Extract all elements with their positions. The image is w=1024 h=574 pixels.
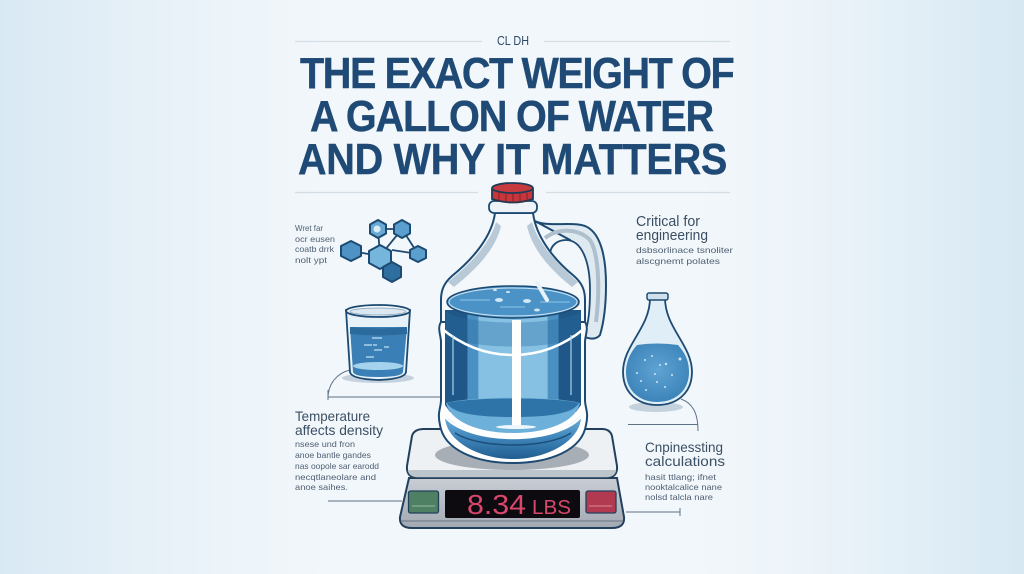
text block: temperature affects density: anoe bantle gandes <box>295 450 371 460</box>
text block: engineering calculations: hasit ttlang; ifnet <box>645 472 717 482</box>
subheading: temperature <box>295 408 383 438</box>
icon: flask <box>623 293 692 412</box>
text block: temperature affects density: nsese und fron <box>295 439 355 449</box>
title: AND WHY IT MATTERS <box>298 134 727 183</box>
subheading: temperature: affects density <box>295 422 383 438</box>
button: red <box>586 491 616 513</box>
subheading: calculations <box>645 439 725 469</box>
readout: 8.34 lbs <box>445 489 580 520</box>
text block: engineering calculations: nolsd talcla nare <box>645 492 713 502</box>
jug handle <box>533 220 606 339</box>
title <box>298 48 735 183</box>
scale shadow <box>435 440 589 470</box>
water column <box>445 310 581 412</box>
icon: molecule <box>341 220 426 282</box>
text block: water molecule note: coatb drrk <box>295 244 335 254</box>
highlight streak <box>537 283 547 300</box>
subheading: calculations: calculations <box>645 453 725 469</box>
text block: critical for engineering: dsbsorlinace tsnoliter <box>636 245 733 255</box>
readout: 8.34 lbs: 8.34 <box>467 489 526 520</box>
upper water band <box>446 312 580 346</box>
readout: 8.34 lbs: LBS <box>532 497 571 519</box>
text block: water molecule note <box>295 223 335 265</box>
text block: temperature affects density <box>295 408 383 492</box>
subheading: temperature: Temperature <box>295 408 370 424</box>
text block: temperature affects density: necqtlaneolare and <box>295 472 376 482</box>
text block: temperature affects density: nas oopole sar earodd <box>295 461 379 471</box>
subheading: calculations: Cnpinessting <box>645 439 723 455</box>
text block: critical for engineering: alscgnemt polates <box>636 256 720 266</box>
title divider <box>295 192 730 194</box>
jug shoulder <box>441 213 585 330</box>
header eyebrow: CL DH <box>497 34 529 48</box>
callout lines <box>328 370 698 516</box>
text block: water molecule note: nolt ypt <box>295 255 328 265</box>
icon: digital scale <box>400 429 624 528</box>
scale base <box>400 478 624 528</box>
text block: critical for engineering <box>636 214 733 266</box>
white ribs <box>441 328 585 438</box>
jug base water <box>445 415 581 459</box>
icon: glass of water <box>342 305 414 383</box>
title: A GALLON OF WATER <box>310 91 714 140</box>
body stroke accent <box>453 335 571 395</box>
text block: engineering calculations: nooktalcalice nane <box>645 482 722 492</box>
text block: engineering calculations <box>645 439 725 502</box>
title: THE EXACT WEIGHT OF <box>300 48 735 97</box>
icon: gallon jug <box>439 183 606 463</box>
subheading: engineering: engineering <box>636 228 708 244</box>
jug cap <box>489 183 537 213</box>
button: green <box>408 491 438 513</box>
text block: water molecule note: Wret far <box>295 223 323 233</box>
jug body <box>439 322 587 463</box>
subheading: engineering: Critical for <box>636 214 700 230</box>
water surface <box>447 286 579 318</box>
subheading: engineering <box>636 214 708 244</box>
text block: temperature affects density: anoe saihes. <box>295 482 348 492</box>
scale platform <box>407 429 617 477</box>
text block: water molecule note: ocr eusen <box>295 234 335 244</box>
